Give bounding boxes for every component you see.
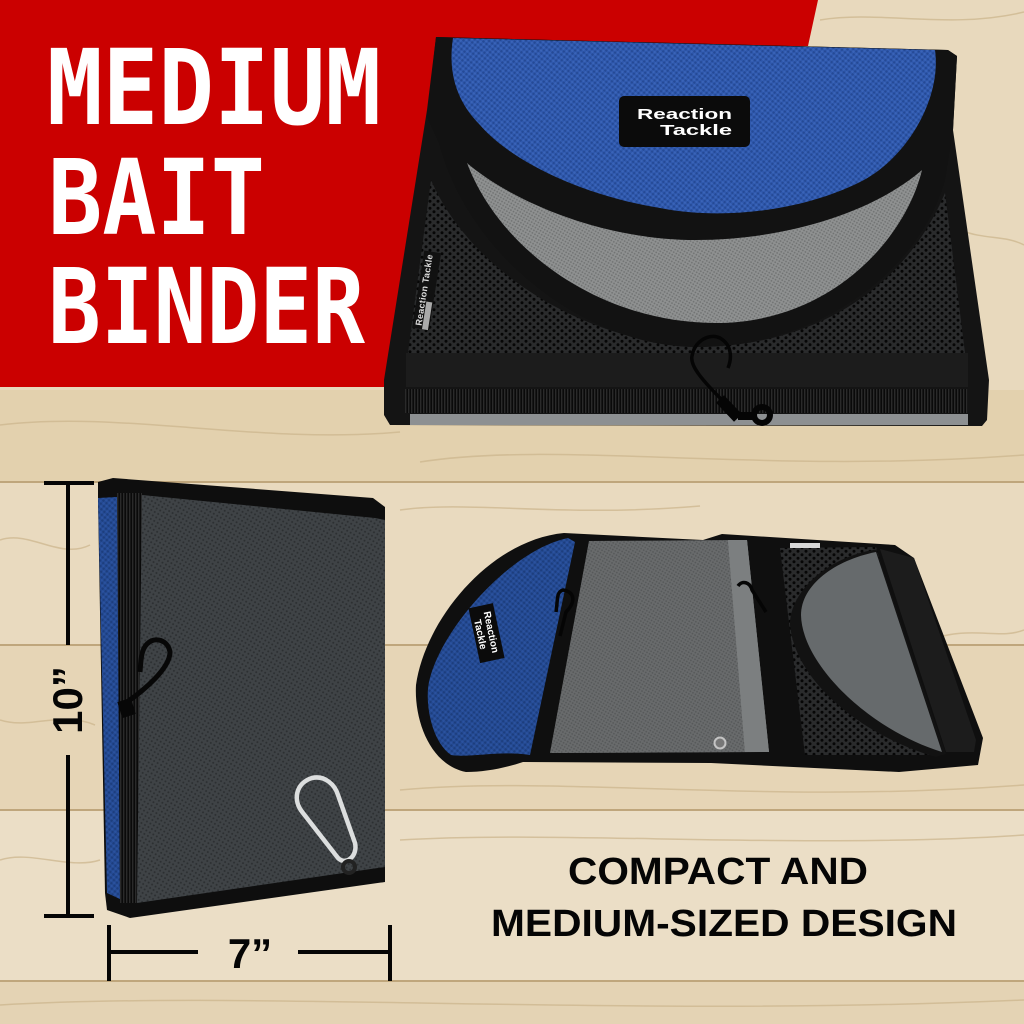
brand patch: Tackle [471, 619, 488, 651]
dimension: width 7 inches [109, 925, 390, 981]
mesh pocket [408, 180, 965, 353]
lens binding [790, 549, 946, 757]
zipper pull [692, 336, 770, 423]
brand patch: Reaction [481, 610, 500, 654]
right band [880, 549, 976, 752]
brand patch [619, 96, 750, 147]
caption: COMPACT AND [568, 851, 868, 893]
title: BINDER [48, 246, 365, 368]
carabiner [297, 777, 355, 873]
title: MEDIUM [47, 27, 381, 149]
side label [412, 251, 441, 330]
zipper pulls [556, 583, 766, 636]
title: BAIT [48, 137, 265, 259]
side label: Reaction Tackle [414, 254, 435, 326]
zipper pull [124, 640, 170, 716]
red title banner [0, 0, 818, 387]
caption: MEDIUM-SIZED DESIGN [491, 903, 957, 945]
small label [790, 543, 820, 548]
title [47, 27, 381, 368]
zipper [405, 389, 968, 413]
product photo: closed binder front [384, 37, 989, 426]
product photo: binder back with carabiner [98, 478, 385, 918]
second pocket band [728, 540, 769, 752]
blue flap [451, 38, 936, 213]
dimension: width 7 inches: 7” [228, 930, 272, 977]
brand patch [468, 603, 505, 663]
grey pocket [550, 540, 769, 753]
grommet [714, 738, 726, 748]
brand patch: Tackle [660, 122, 732, 139]
mesh pocket [780, 547, 936, 755]
flap and pocket binding [427, 37, 957, 347]
binder body [384, 37, 989, 426]
blue flap [428, 538, 575, 756]
grey window [801, 552, 942, 752]
product photo: binder opened [416, 533, 983, 772]
dimension: height 10 inches: 10” [44, 666, 91, 734]
brand patch: Reaction [637, 106, 732, 123]
grey window [467, 163, 922, 323]
dimension: height 10 inches [44, 483, 94, 916]
grey lower strip [410, 414, 968, 425]
webbing band [406, 353, 968, 387]
caption [491, 851, 957, 945]
